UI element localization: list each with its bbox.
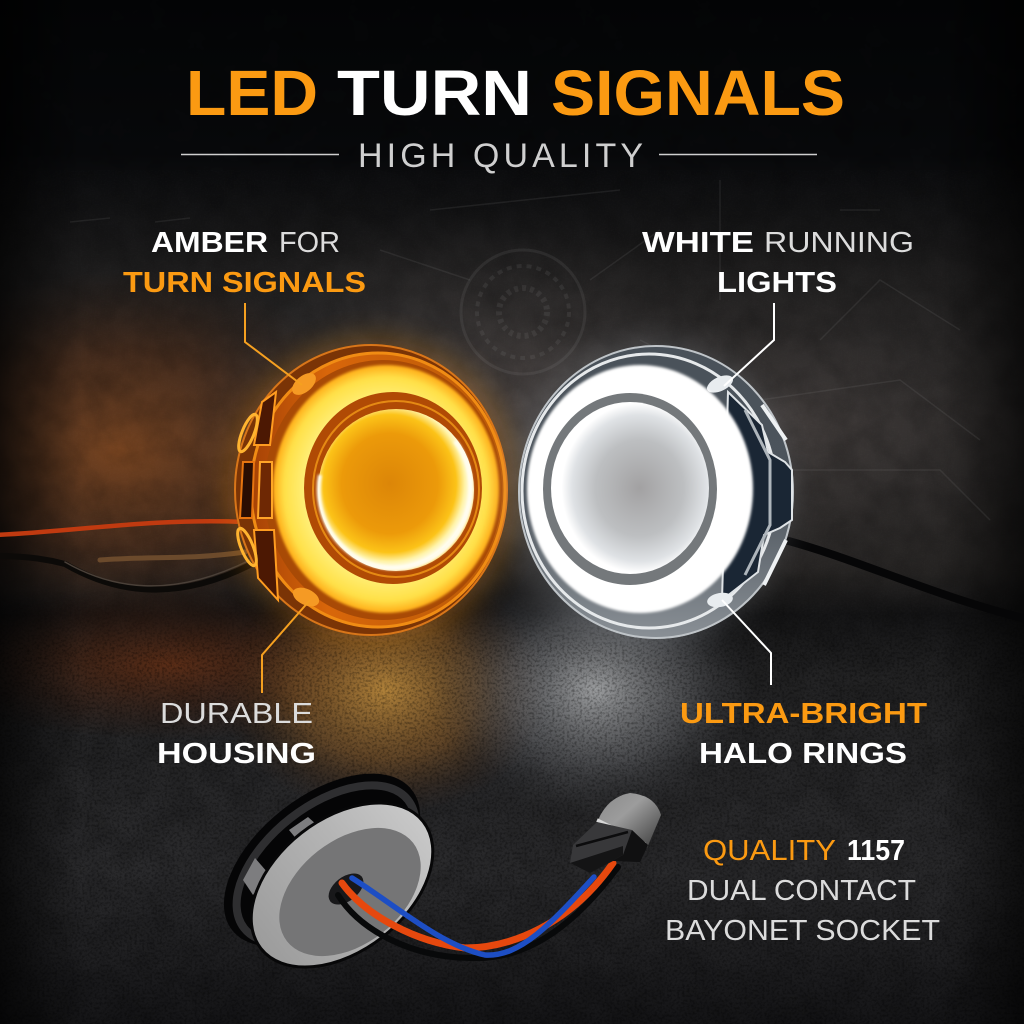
- callout: ultra-bright halo rings: [680, 698, 927, 770]
- subtitle with rules: HIGH QUALITY: [358, 137, 643, 175]
- wire bundle: [338, 863, 618, 958]
- white halo ring: [527, 365, 753, 613]
- inner grey plate: [255, 802, 445, 982]
- callout: durable housing: DURABLE: [160, 698, 313, 730]
- callout: ultra-bright halo rings: HALO RINGS: [699, 738, 907, 770]
- housing rear view with wires and socket: [193, 739, 661, 1000]
- socket description: BAYONET SOCKET: [665, 915, 940, 947]
- amber halo ring: [273, 365, 499, 613]
- white glowing core: [551, 402, 709, 574]
- amber LED lamp: [227, 338, 517, 642]
- amber inner bezel: [304, 392, 482, 584]
- callout: amber for turn signals: FOR: [279, 227, 340, 259]
- callout: white running lights: RUNNING: [764, 227, 914, 259]
- amber lamp housing: [234, 344, 508, 636]
- amber glowing core: [318, 409, 474, 571]
- callout: durable housing: [157, 698, 316, 770]
- callout: white running lights: LIGHTS: [717, 267, 837, 299]
- callout: ultra-bright halo rings: ULTRA-BRIGHT: [680, 698, 927, 730]
- socket description: QUALITY: [703, 835, 836, 867]
- callout: amber for turn signals: [123, 227, 366, 299]
- socket description: DUAL CONTACT: [687, 875, 916, 907]
- callout: white running lights: WHITE: [642, 227, 754, 259]
- white LED lamp: [505, 337, 795, 647]
- title: [186, 57, 845, 129]
- title: LED: [186, 57, 318, 129]
- callout: amber for turn signals: AMBER: [151, 227, 268, 259]
- callout: durable housing: HOUSING: [157, 738, 316, 770]
- socket description: 1157: [847, 835, 905, 867]
- bayonet socket connector: [570, 793, 661, 873]
- wire: right white lamp: [785, 540, 1024, 620]
- title: SIGNALS: [551, 57, 845, 129]
- black housing shell: [193, 739, 451, 981]
- title: TURN: [337, 57, 532, 129]
- socket description: [665, 835, 940, 947]
- centre hole: [323, 867, 369, 911]
- faint blueprint pattern in background: [70, 180, 990, 520]
- white inner bezel: [543, 393, 717, 585]
- callout: white running lights: [642, 227, 914, 299]
- wires: left amber lamp: [0, 521, 250, 590]
- white lamp housing: [518, 345, 794, 639]
- callout lines: [245, 303, 774, 693]
- grey back disc: [220, 770, 464, 1000]
- callout: amber for turn signals: TURN SIGNALS: [123, 267, 366, 299]
